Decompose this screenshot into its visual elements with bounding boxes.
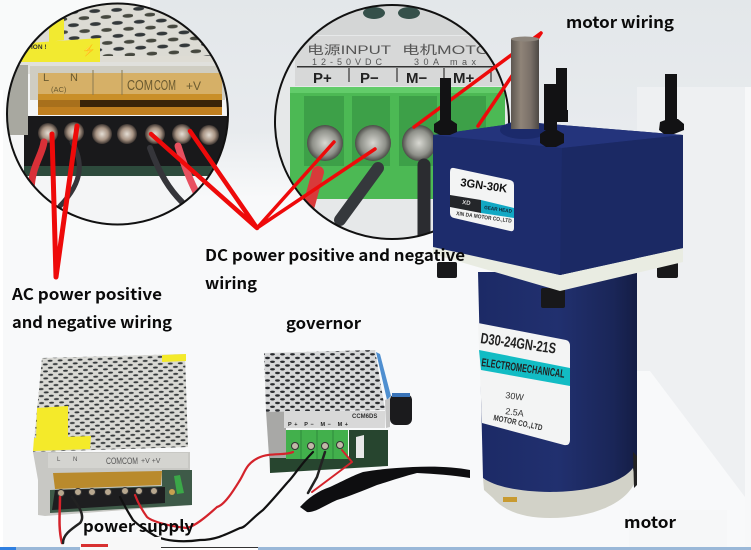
input and motor label strip: 电源INPUT	[307, 43, 392, 57]
label: governor: governor	[286, 310, 361, 334]
rating label: ELECTROMECHANICAL	[481, 357, 565, 381]
green terminal block	[290, 87, 505, 199]
screws	[38, 122, 219, 145]
end cap	[483, 452, 637, 518]
screws	[58, 488, 158, 496]
gearbox label: GEAR HEAD	[484, 205, 513, 215]
gear head motor	[433, 36, 684, 518]
metal chassis	[33, 452, 192, 516]
gearbox label: XIN DA MOTOR CO.,LTD	[456, 211, 512, 225]
label: AC wiring	[11, 281, 172, 333]
input and motor label strip: 电机MOTOR	[402, 43, 502, 57]
label: power supply: power supply	[83, 513, 194, 537]
screws	[292, 442, 344, 450]
circuit board	[50, 470, 192, 513]
amber terminal cover	[53, 471, 162, 489]
thick black motor cable	[300, 467, 470, 512]
bottom window strip	[0, 547, 751, 550]
shaft collar	[500, 121, 548, 139]
gearbox label	[450, 168, 514, 231]
rating label: 2.5A	[505, 406, 524, 419]
terminal label strip: N	[70, 72, 78, 84]
mesh cover	[60, 6, 220, 56]
circuit board	[270, 430, 388, 473]
green terminals	[286, 430, 348, 459]
input and motor label strip	[295, 36, 505, 87]
gearbox label: XD	[462, 200, 471, 207]
input and motor label strip: M+	[453, 70, 474, 87]
yellow caution sticker: ⚡	[82, 44, 96, 57]
chassis side	[266, 411, 286, 472]
terminal label strip: COM	[154, 77, 176, 94]
label strip: L	[57, 457, 61, 463]
mounting feet	[437, 262, 678, 308]
knob	[385, 393, 412, 428]
terminal screws	[307, 125, 436, 161]
control label: CCM6DS	[352, 414, 377, 420]
label: AC wiring: AC power positive	[11, 281, 162, 305]
terminal block	[24, 116, 229, 166]
label: DC wiring	[205, 242, 465, 294]
terminal label strip	[43, 70, 201, 95]
rating label: D30-24GN-21S	[479, 330, 557, 358]
control label	[284, 411, 385, 428]
white spacer plate	[433, 245, 683, 291]
gearbox label: 3GN-30K	[460, 177, 508, 196]
input and motor label strip: M−	[406, 70, 427, 87]
red connection lines: DC	[151, 131, 375, 228]
wires	[31, 142, 196, 206]
input and motor label strip: 12-50VDC	[312, 57, 382, 67]
rating label: 30W	[505, 390, 525, 403]
input and motor label strip: 30A max	[414, 57, 476, 67]
white patch behind motor label	[629, 510, 727, 547]
wires	[309, 165, 424, 235]
photo: power supply	[33, 354, 192, 516]
mesh top	[33, 354, 188, 452]
terminal label strip: +V	[186, 79, 201, 93]
terminal label strip: COM	[127, 77, 153, 94]
label strip: +V +V	[141, 458, 161, 465]
caution stickers	[33, 354, 186, 451]
input and motor label strip: P−	[360, 70, 379, 87]
panel: power supply terminal close-up	[0, 0, 240, 230]
label: AC wiring: and negative wiring	[12, 309, 172, 333]
mesh cover	[264, 350, 385, 412]
output shaft	[511, 36, 539, 129]
amber insulating cover	[38, 73, 222, 115]
motor cylinder	[478, 272, 637, 493]
label strip	[48, 453, 188, 468]
wiring between units	[60, 450, 352, 543]
red connection lines: AC	[52, 126, 77, 277]
gearbox body	[433, 122, 683, 275]
label: DC wiring: DC power positive and negative	[205, 242, 465, 266]
photo: governor	[264, 350, 412, 473]
rating label	[478, 323, 570, 445]
yellow caution sticker	[15, 19, 100, 63]
white patch behind power supply label	[80, 537, 161, 550]
terminal label strip: L	[43, 72, 49, 84]
control label: P+ P− M− M+	[288, 422, 348, 428]
terminal label strip: (AC)	[51, 85, 67, 94]
terminal block	[52, 475, 184, 510]
label: motor wiring: motor wiring	[566, 9, 674, 33]
panel: governor terminal close-up	[270, 0, 520, 240]
yellow caution sticker: TION !	[27, 44, 46, 51]
red connection lines: motor	[414, 33, 541, 127]
indicator holes	[363, 7, 420, 19]
label strip: N	[73, 457, 77, 463]
label: motor: motor	[624, 509, 676, 533]
mounting bolts	[434, 68, 684, 147]
input and motor label strip: P+	[313, 70, 332, 87]
rating label: MOTOR CO.,LTD	[493, 413, 544, 432]
label strip: COMCOM	[106, 456, 138, 466]
label: DC wiring: wiring	[205, 270, 257, 294]
